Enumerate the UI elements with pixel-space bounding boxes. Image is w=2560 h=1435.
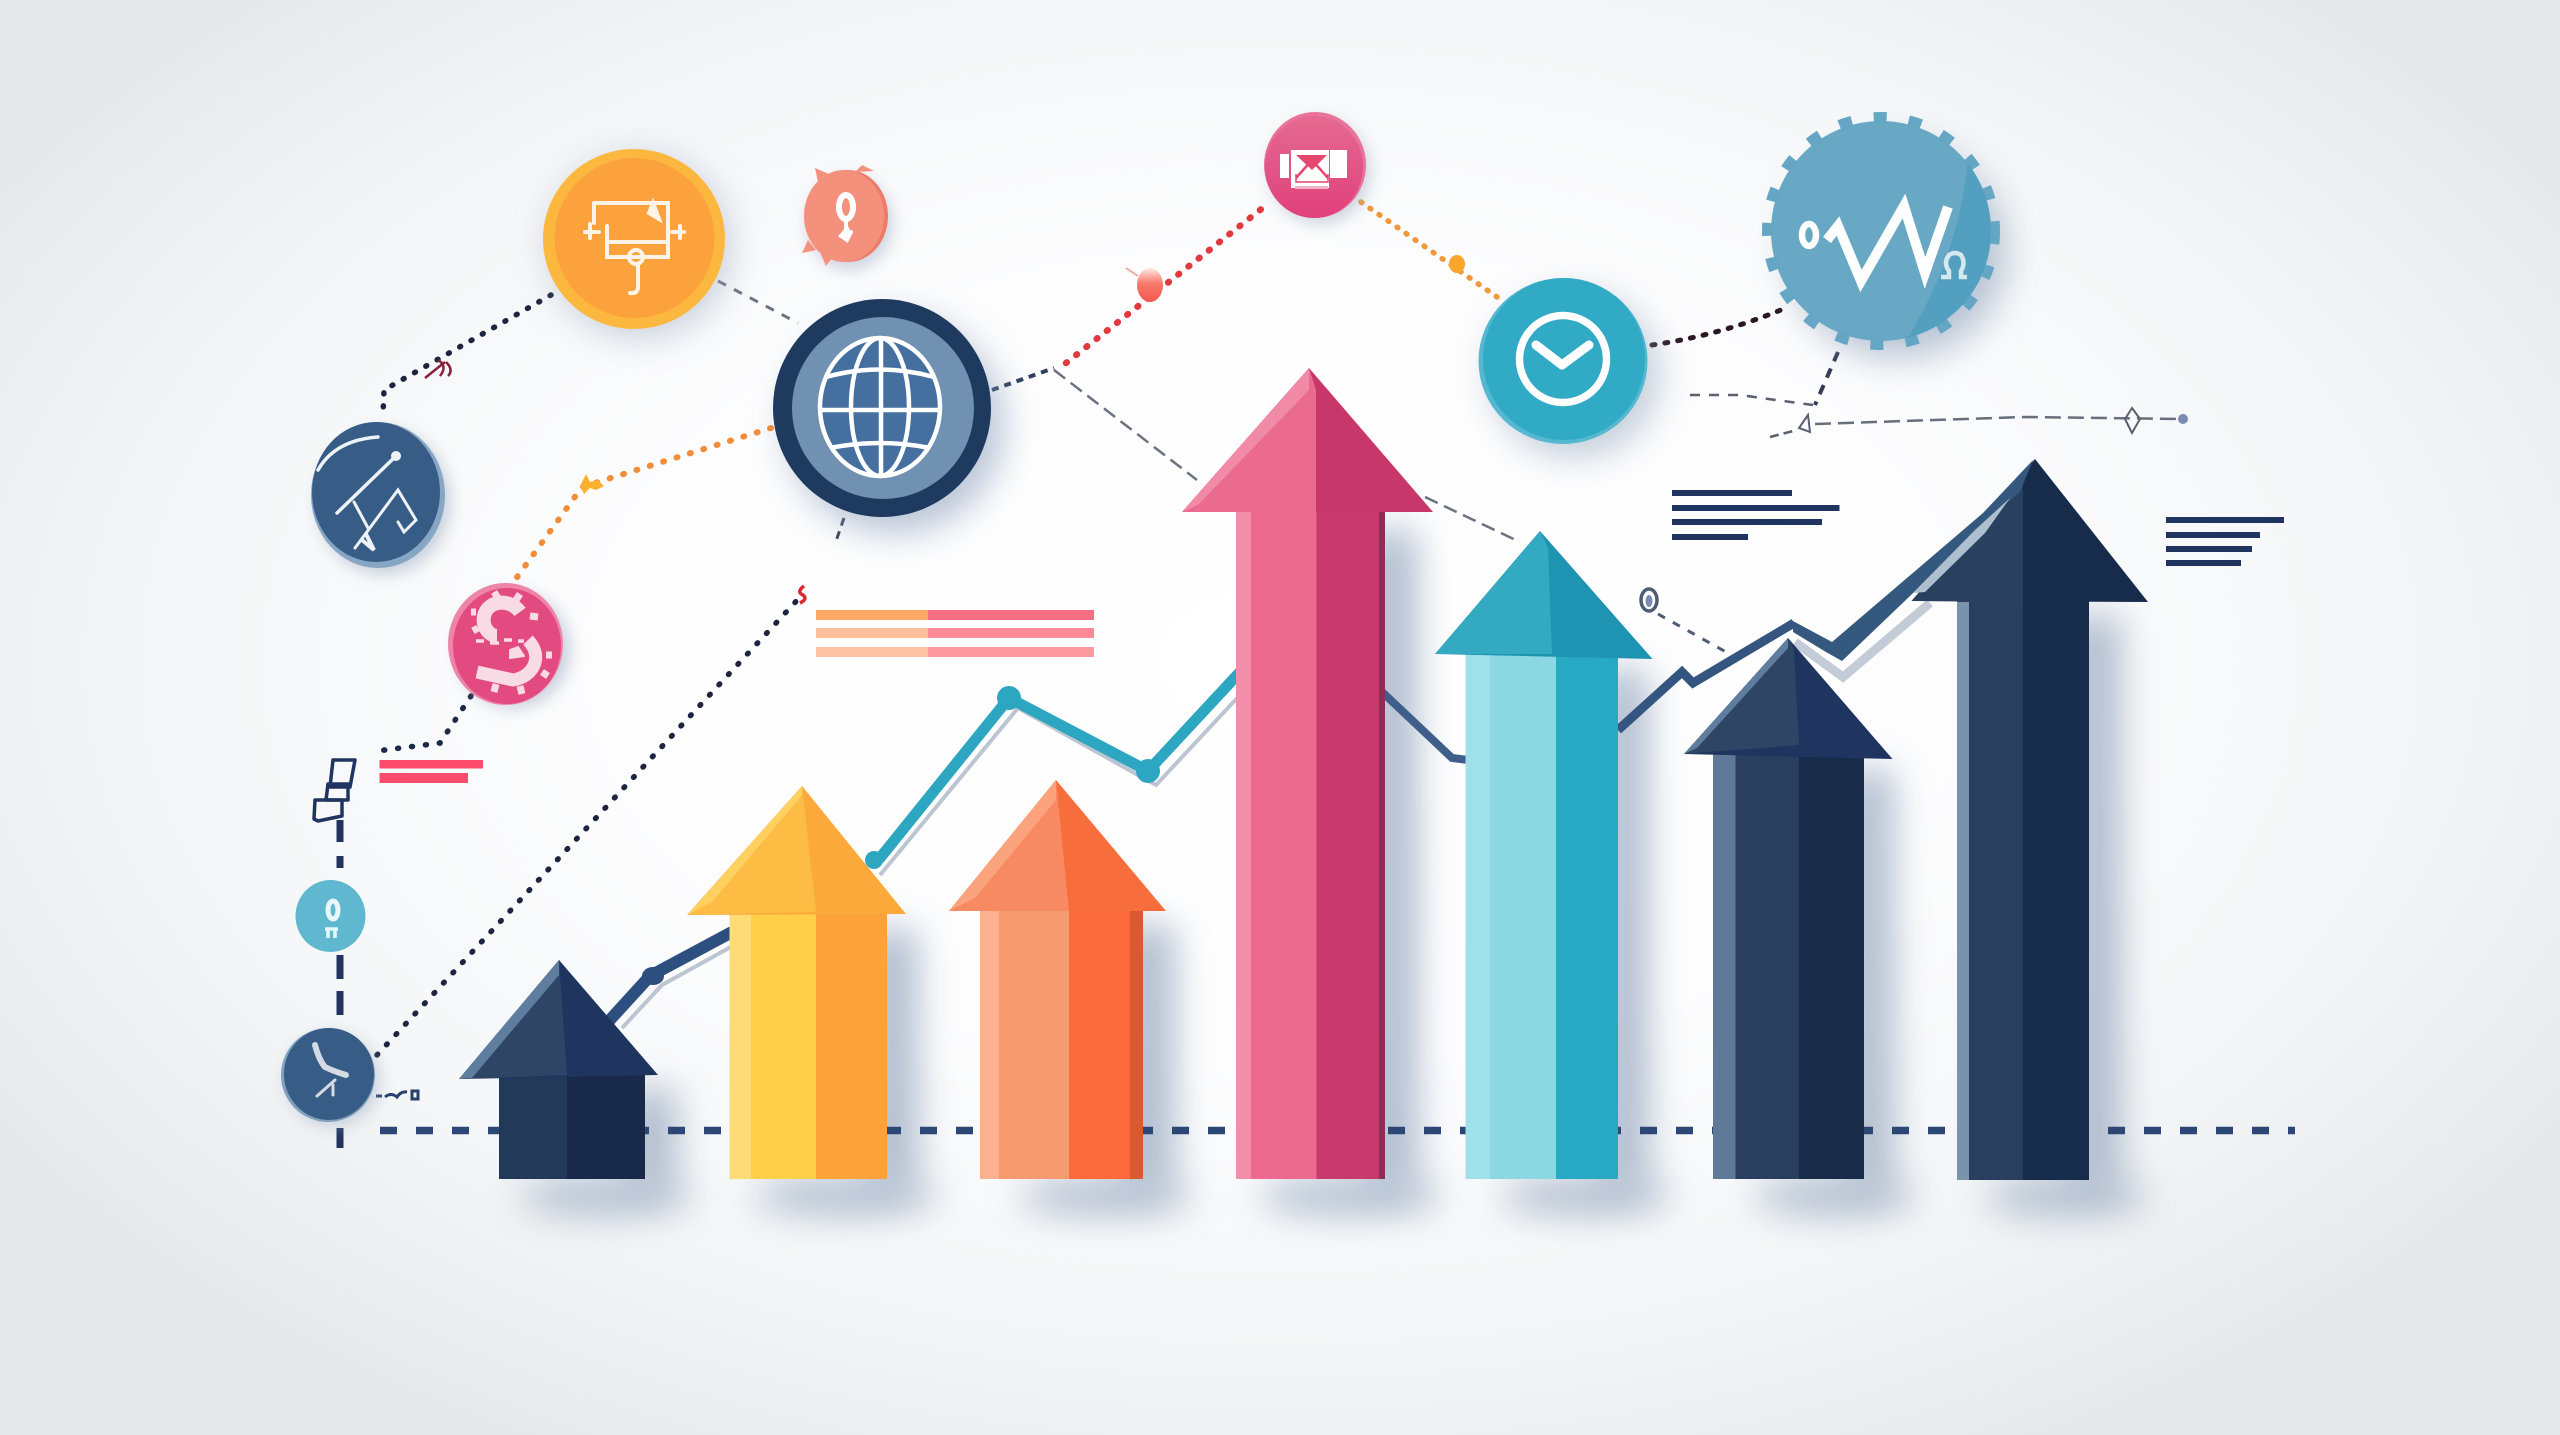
small connector near bottom node (376, 1091, 418, 1099)
dotted connector: diagonal from bottom node (377, 586, 805, 1055)
icon: orange coin (543, 149, 730, 337)
dashed connector: small ring marker (1641, 589, 1726, 652)
navy segment right (1380, 690, 1468, 760)
line chart (608, 603, 1930, 1028)
icon: blue gear (1768, 118, 2010, 358)
envelope glyph (1280, 150, 1347, 189)
line nodes (642, 686, 1160, 985)
arrow 5: teal (1435, 531, 1652, 1179)
dotted connector: globe to pink S (515, 428, 771, 580)
dotted connector: clock to gear (1652, 307, 1788, 345)
navy segment (608, 932, 732, 1022)
icon: globe badge (773, 299, 1003, 533)
wave glyph (1802, 206, 1967, 281)
dotted connector: red to mail (1066, 203, 1269, 363)
icon: salmon marker (802, 165, 892, 270)
arrow 7: dark navy (1912, 459, 2148, 1180)
text placeholder: red bars (380, 760, 483, 783)
icon: pink mail circle (1264, 112, 1370, 224)
red squiggle (800, 586, 805, 603)
dotted connector: dark dots upper left (383, 295, 551, 415)
squiggle marker (425, 360, 451, 378)
icon: navy tools circle (311, 422, 450, 574)
text placeholder: navy bars centre-right (1672, 490, 1840, 540)
arrow 2: yellow (687, 786, 906, 1179)
dashed connector: orange coin to globe (718, 281, 798, 323)
dotted connector: mail to clock (1361, 202, 1497, 297)
dashed connector: long gray (1054, 370, 1520, 542)
arrow 6: navy (1684, 638, 1892, 1179)
flowchart glyph (585, 203, 684, 293)
globe glyph (819, 338, 941, 476)
dotted connector: pink S to red bars (377, 696, 471, 751)
arrow 3: orange (949, 780, 1166, 1179)
icon: teal clock circle (1478, 278, 1659, 457)
icon: small teal circle (296, 880, 366, 952)
text placeholder: navy bars far right (2166, 517, 2284, 566)
clock glyph (1520, 316, 1606, 402)
icon: document stack (314, 760, 355, 821)
icon: navy bottom circle (281, 1028, 379, 1126)
dashed connectors: under gear (1690, 352, 2188, 437)
amber marker (1449, 255, 1465, 273)
small red marker (1126, 268, 1163, 302)
icon: pink S circle (448, 583, 570, 708)
infographic canvas (280, 112, 2295, 1236)
stub from globe to right (992, 368, 1054, 390)
line chart: final rising segment over arrow 7 (1793, 460, 2033, 661)
teal segment (868, 672, 1240, 862)
vertical dashed axis (336, 820, 344, 1148)
key glyph (839, 195, 853, 240)
baseline dashed axis (380, 1127, 2295, 1134)
gear S glyph (471, 592, 552, 694)
arrow shadows (520, 530, 2145, 1214)
orange marker (580, 474, 604, 494)
text placeholder: orange and pink bars (816, 610, 1094, 657)
arrow 1: navy house (459, 960, 658, 1179)
line shadow (622, 603, 1930, 1028)
arrow 4: pink tallest center (1182, 368, 1433, 1179)
dashed stub below globe (835, 518, 844, 544)
